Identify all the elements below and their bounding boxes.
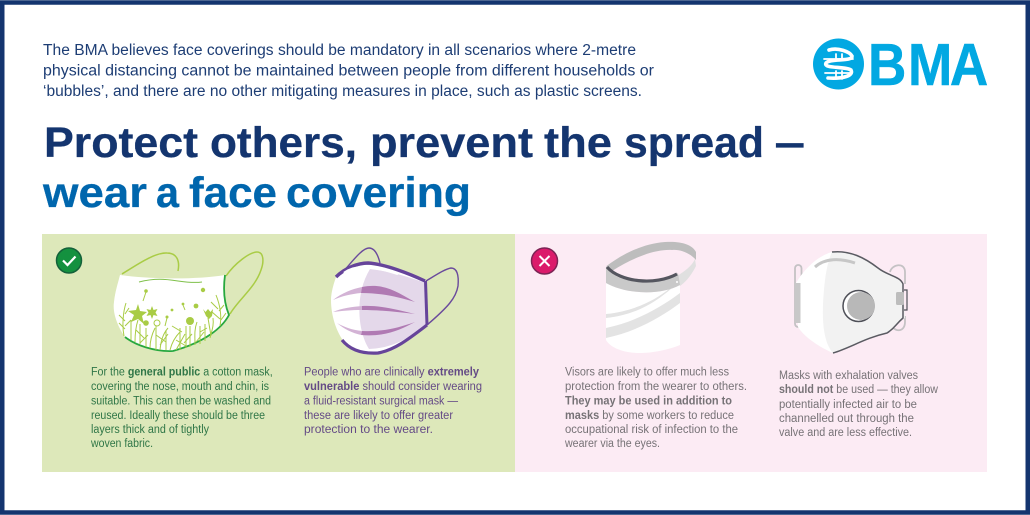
main heading <box>42 119 803 217</box>
text: exhalation valves: channelled out through the <box>779 413 914 425</box>
heading line one: prevent <box>370 119 533 167</box>
text: extremely vulnerable: these are likely to offer greater <box>304 410 453 422</box>
text: extremely vulnerable <box>304 367 482 436</box>
icon: tick <box>56 248 82 273</box>
intro text: The BMA believes face coverings should be mandatory in all scenarios where 2-metre <box>43 42 636 59</box>
text: visors: They may be used in addition to <box>565 396 732 408</box>
heading line two: a <box>156 169 180 217</box>
intro text: physical distancing cannot be maintained between people from different households or <box>43 62 654 80</box>
icon: valve mask <box>795 252 907 353</box>
heading line one: spread <box>624 119 764 167</box>
heading line two: wear <box>42 169 147 217</box>
panel: recommended coverings <box>42 234 515 472</box>
text: extremely vulnerable: People who are clinically extremely <box>304 367 480 379</box>
text: exhalation valves: should not be used — they allow <box>779 384 939 396</box>
text: extremely vulnerable: protection to the wearer. <box>304 424 433 436</box>
BMA logo: BMA <box>868 31 988 98</box>
icon: surgical mask <box>331 248 458 353</box>
heading line two: face <box>189 169 277 217</box>
heading line two: covering <box>286 169 471 217</box>
text: general public: covering the nose, mouth and chin, is <box>91 381 269 393</box>
text: general public: layers thick and of tightly <box>91 424 209 436</box>
text: general public: For the general public a cotton mask, <box>91 367 273 379</box>
text: general public: suitable. This can then be washed and <box>91 396 271 408</box>
text: exhalation valves: Masks with exhalation valves <box>779 370 918 382</box>
text: visors: masks by some workers to reduce <box>565 410 734 422</box>
text: visors: protection from the wearer to others. <box>565 381 747 393</box>
text: visors: wearer via the eyes. <box>564 438 660 450</box>
text: exhalation valves: potentially infected air to be <box>779 399 917 411</box>
panel: coverings to avoid <box>515 234 987 472</box>
icon: cross <box>532 248 558 274</box>
text: general public: reused. Ideally these should be three <box>91 410 265 422</box>
intro text <box>43 42 654 100</box>
heading line one <box>44 119 804 167</box>
heading line one: — <box>776 119 804 167</box>
text: exhalation valves: valve and are less effective. <box>779 427 912 439</box>
BMA logo <box>813 31 988 98</box>
text: exhalation valves <box>779 370 939 439</box>
text: visors <box>564 367 747 450</box>
heading line two <box>42 169 471 217</box>
text: visors: Visors are likely to offer much less <box>565 367 729 379</box>
heading line one: others, <box>210 119 357 167</box>
text: general public: woven fabric. <box>90 438 153 450</box>
text: general public <box>90 367 273 450</box>
intro text: ‘bubbles’, and there are no other mitigating measures in place, such as plastic screens. <box>43 83 642 100</box>
heading line one: Protect <box>44 119 198 167</box>
heading line one: the <box>544 119 612 167</box>
text: extremely vulnerable: a fluid-resistant surgical mask — <box>304 396 458 408</box>
text: extremely vulnerable: vulnerable should consider wearing <box>304 381 482 393</box>
text: visors: occupational risk of infection to the <box>565 424 738 436</box>
icon: cotton floral mask <box>114 252 263 352</box>
icon: visor <box>606 242 696 353</box>
